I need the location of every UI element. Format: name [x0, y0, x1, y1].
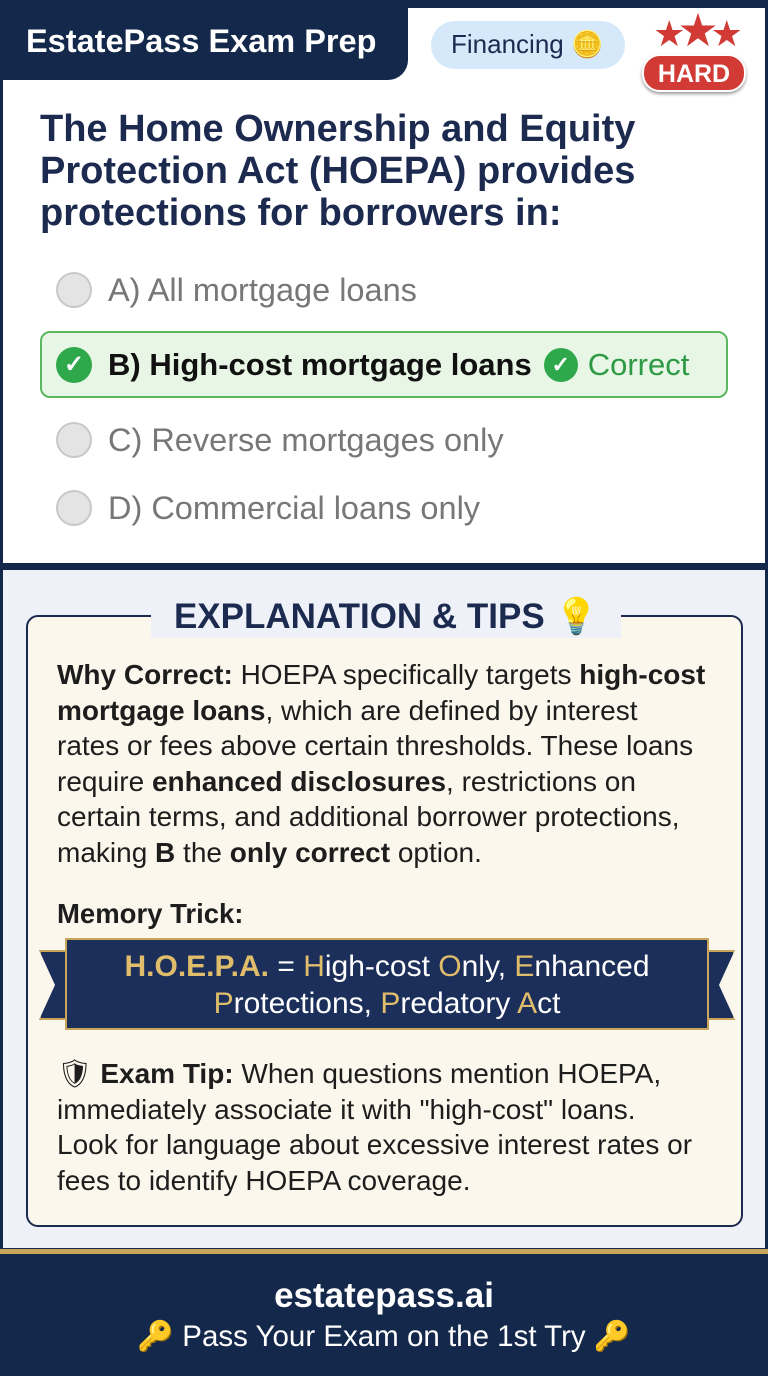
question title: The Home Ownership and Equity Protection Act (HOEPA) provides protections for borrowers in: [40, 108, 635, 234]
gold divider [0, 1249, 768, 1254]
option C: C) Reverse mortgages only [108, 422, 504, 458]
why correct text: require enhanced disclosures, restrictions on [57, 766, 636, 797]
option B correct [40, 331, 728, 398]
difficulty badge: ★★★ [653, 4, 735, 56]
header tab: EstatePass Exam Prep [26, 23, 376, 59]
option B correct: Correct [588, 346, 689, 382]
why correct text: mortgage loans, which are defined by interest [57, 695, 637, 726]
memory banner: H.O.E.P.A. = High-cost Only, Enhanced [124, 950, 650, 983]
footer: 🔑 Pass Your Exam on the 1st Try 🔑 [137, 1320, 631, 1353]
white question panel [3, 8, 765, 563]
why correct text: Why Correct: HOEPA specifically targets high-cost [57, 659, 705, 690]
option D: D) Commercial loans only [108, 490, 480, 526]
why correct text: rates or fees above certain thresholds. These loans [57, 730, 693, 761]
memory trick label: Memory Trick: [57, 898, 243, 929]
option B correct: ✓ [551, 352, 570, 376]
why correct text: certain terms, and additional borrower protections, [57, 801, 680, 832]
explanation heading: EXPLANATION & TIPS 💡 [174, 597, 598, 636]
memory banner: Protections, Predatory Act [214, 987, 560, 1020]
category pill: Financing 🪙 [451, 29, 603, 59]
why correct text: making B the only correct option. [57, 837, 482, 868]
footer [137, 1276, 631, 1353]
difficulty badge: HARD [658, 60, 730, 88]
option B correct: ✓ [64, 350, 84, 378]
option A: A) All mortgage loans [108, 272, 417, 308]
explanation card [26, 615, 743, 1227]
footer: estatepass.ai [274, 1276, 494, 1315]
option B correct: B) High-cost mortgage loans [108, 346, 532, 382]
exam tip text: fees to identify HOEPA coverage. [57, 1165, 470, 1196]
header tab [0, 0, 408, 80]
exam tip text: Look for language about excessive interest rates or [57, 1129, 692, 1160]
explanation section [3, 570, 765, 1248]
exam tip text: immediately associate it with "high-cost" loans. [57, 1094, 636, 1125]
exam tip text: 🛡 Exam Tip: When questions mention HOEPA, [57, 1058, 661, 1089]
why correct text [57, 659, 705, 868]
difficulty badge [640, 4, 748, 96]
exam tip text [57, 1058, 692, 1196]
memory banner [39, 938, 735, 1030]
category pill [431, 21, 625, 69]
